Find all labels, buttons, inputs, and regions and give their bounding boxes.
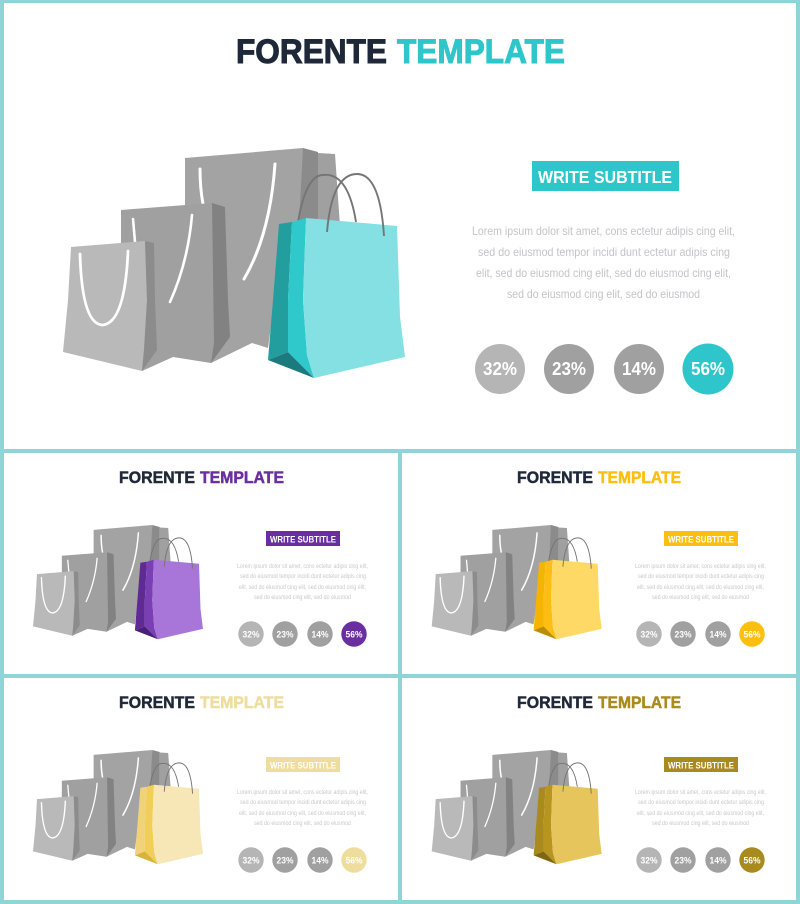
body text [635, 564, 766, 601]
title: TEMPLATE [200, 693, 284, 712]
body text: sed do eiusmod tempor incidi dunt ectetur adipis cing [240, 574, 366, 580]
body text: sed do eiusmod tempor incidi dunt ectetur adipis cing [240, 800, 366, 806]
subtitle badge: WRITE SUBTITLE [538, 167, 672, 187]
title: FORENTE [517, 468, 593, 487]
illustration: shopping bags [432, 750, 602, 864]
percentage circles: 14% [312, 856, 329, 866]
body text: elit, sed do eiusmod cing elit, sed do eiusmod cing elit, [476, 266, 731, 280]
body text: sed do eiusmod cing elit, sed do eiusmod [254, 595, 351, 601]
percentage circles: 14% [710, 856, 727, 866]
percentage circles [475, 344, 734, 394]
title: FORENTE [119, 693, 195, 712]
percentage circles: 32% [242, 630, 260, 640]
percentage circles: 56% [346, 856, 363, 866]
body text [635, 790, 766, 827]
body text: sed do eiusmod cing elit, sed do eiusmod [652, 595, 749, 601]
illustration: shopping bags [33, 525, 203, 639]
percentage circles: 23% [552, 359, 586, 379]
panel: teal main slide [4, 3, 796, 449]
body text: Lorem ipsum dolor sit amet, cons ectetur adipis cing elit, [237, 564, 368, 570]
percentage circles: 56% [346, 630, 363, 640]
percentage circles: 56% [691, 359, 725, 379]
body text: sed do eiusmod tempor incidi dunt ectetur adipis cing [478, 245, 730, 259]
body text: sed do eiusmod cing elit, sed do eiusmod [507, 287, 700, 301]
body text: elit, sed do eiusmod cing elit, sed do eiusmod cing elit, [239, 811, 366, 817]
body text: Lorem ipsum dolor sit amet, cons ectetur adipis cing elit, [472, 224, 735, 238]
subtitle badge: WRITE SUBTITLE [270, 534, 336, 544]
title: TEMPLATE [598, 468, 681, 487]
panel: pale cream slide [4, 678, 398, 900]
percentage circles [238, 621, 367, 647]
subtitle badge [266, 757, 340, 772]
title: FORENTE [119, 468, 195, 487]
panel: purple slide [4, 453, 398, 674]
illustration: shopping bags [33, 750, 203, 864]
body text: elit, sed do eiusmod cing elit, sed do eiusmod cing elit, [637, 585, 764, 591]
illustration: shopping bags [63, 148, 405, 378]
title: TEMPLATE [200, 468, 284, 487]
body text: Lorem ipsum dolor sit amet, cons ectetur adipis cing elit, [635, 790, 766, 796]
title: TEMPLATE [397, 33, 565, 71]
percentage circles: 32% [640, 856, 658, 866]
illustration: shopping bags [432, 525, 602, 639]
subtitle badge [664, 531, 738, 546]
subtitle badge: WRITE SUBTITLE [270, 760, 336, 770]
percentage circles: 23% [674, 856, 692, 866]
title: FORENTE [236, 33, 387, 71]
percentage circles: 23% [674, 630, 692, 640]
percentage circles: 56% [744, 856, 761, 866]
subtitle badge [532, 161, 679, 191]
body text: sed do eiusmod cing elit, sed do eiusmod [254, 821, 351, 827]
percentage circles: 32% [640, 630, 658, 640]
percentage circles: 32% [242, 856, 260, 866]
percentage circles: 14% [622, 359, 656, 379]
percentage circles: 14% [312, 630, 329, 640]
subtitle badge [266, 531, 340, 546]
percentage circles: 23% [276, 630, 294, 640]
subtitle badge [664, 757, 738, 772]
percentage circles: 56% [744, 630, 761, 640]
title: TEMPLATE [598, 693, 681, 712]
percentage circles [636, 847, 765, 873]
body text: sed do eiusmod tempor incidi dunt ectetur adipis cing [638, 800, 764, 806]
subtitle badge: WRITE SUBTITLE [668, 534, 734, 544]
title: FORENTE [517, 693, 593, 712]
body text: elit, sed do eiusmod cing elit, sed do eiusmod cing elit, [239, 585, 366, 591]
percentage circles [636, 621, 765, 647]
percentage circles: 32% [483, 359, 517, 379]
body text [237, 790, 368, 827]
body text: sed do eiusmod tempor incidi dunt ectetur adipis cing [638, 574, 764, 580]
percentage circles: 23% [276, 856, 294, 866]
body text [237, 564, 368, 601]
body text [472, 224, 735, 301]
percentage circles: 14% [710, 630, 727, 640]
body text: sed do eiusmod cing elit, sed do eiusmod [652, 821, 749, 827]
body text: Lorem ipsum dolor sit amet, cons ectetur adipis cing elit, [635, 564, 766, 570]
body text: Lorem ipsum dolor sit amet, cons ectetur adipis cing elit, [237, 790, 368, 796]
body text: elit, sed do eiusmod cing elit, sed do eiusmod cing elit, [637, 811, 764, 817]
percentage circles [238, 847, 367, 873]
panel: gold slide [402, 678, 796, 900]
panel: yellow slide [402, 453, 796, 674]
subtitle badge: WRITE SUBTITLE [668, 760, 734, 770]
